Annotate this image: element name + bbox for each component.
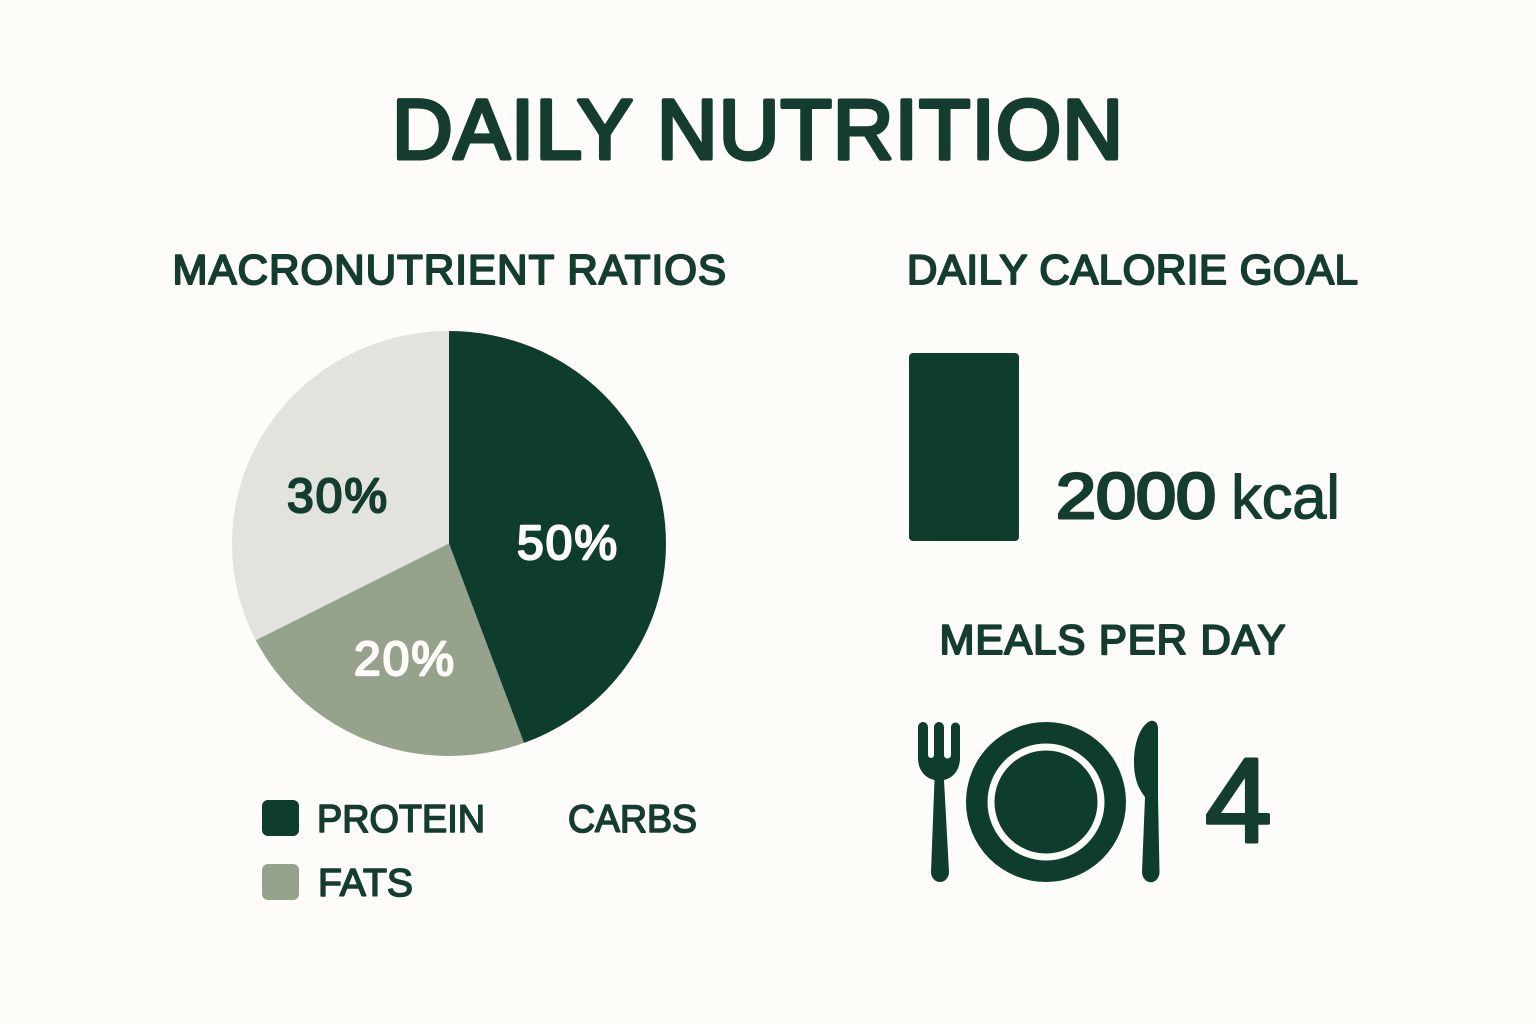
slice: 50% [449,331,666,743]
calorie bar [909,353,1019,541]
legend swatch: fats [262,864,299,900]
pie chart [232,331,666,756]
heading: meals per day: MEALS PER DAY [940,616,1286,663]
plate ring [991,747,1101,857]
label: 50%: 50% [517,517,617,570]
value: 4: 4 [1205,734,1272,868]
value: 2000: 2000 [1056,460,1216,532]
heading: macronutrient ratios: MACRONUTRIENT RATIOS [172,246,726,293]
label: 20%: 20% [354,633,454,686]
unit: kcal: kcal [1231,464,1340,532]
label: 30%: 30% [287,470,387,523]
heading: daily calorie goal: DAILY CALORIE GOAL [907,246,1358,293]
legend [262,798,697,905]
plate rim [966,722,1126,882]
legend label: carbs: CARBS [568,798,697,841]
icon: fork [918,722,960,882]
slice: 20% [256,544,524,756]
legend swatch: protein [262,800,299,836]
panel: macronutrient ratios [172,246,726,905]
panel: daily calorie goal [907,246,1358,541]
panel: meals per day [918,616,1286,882]
icon: knife [1134,721,1160,882]
legend label: protein: PROTEIN [317,798,485,841]
icon: plate [966,722,1126,882]
legend label: fats: FATS [318,862,413,905]
slice: 30% [232,331,449,640]
title: DAILY NUTRITION [392,82,1123,176]
